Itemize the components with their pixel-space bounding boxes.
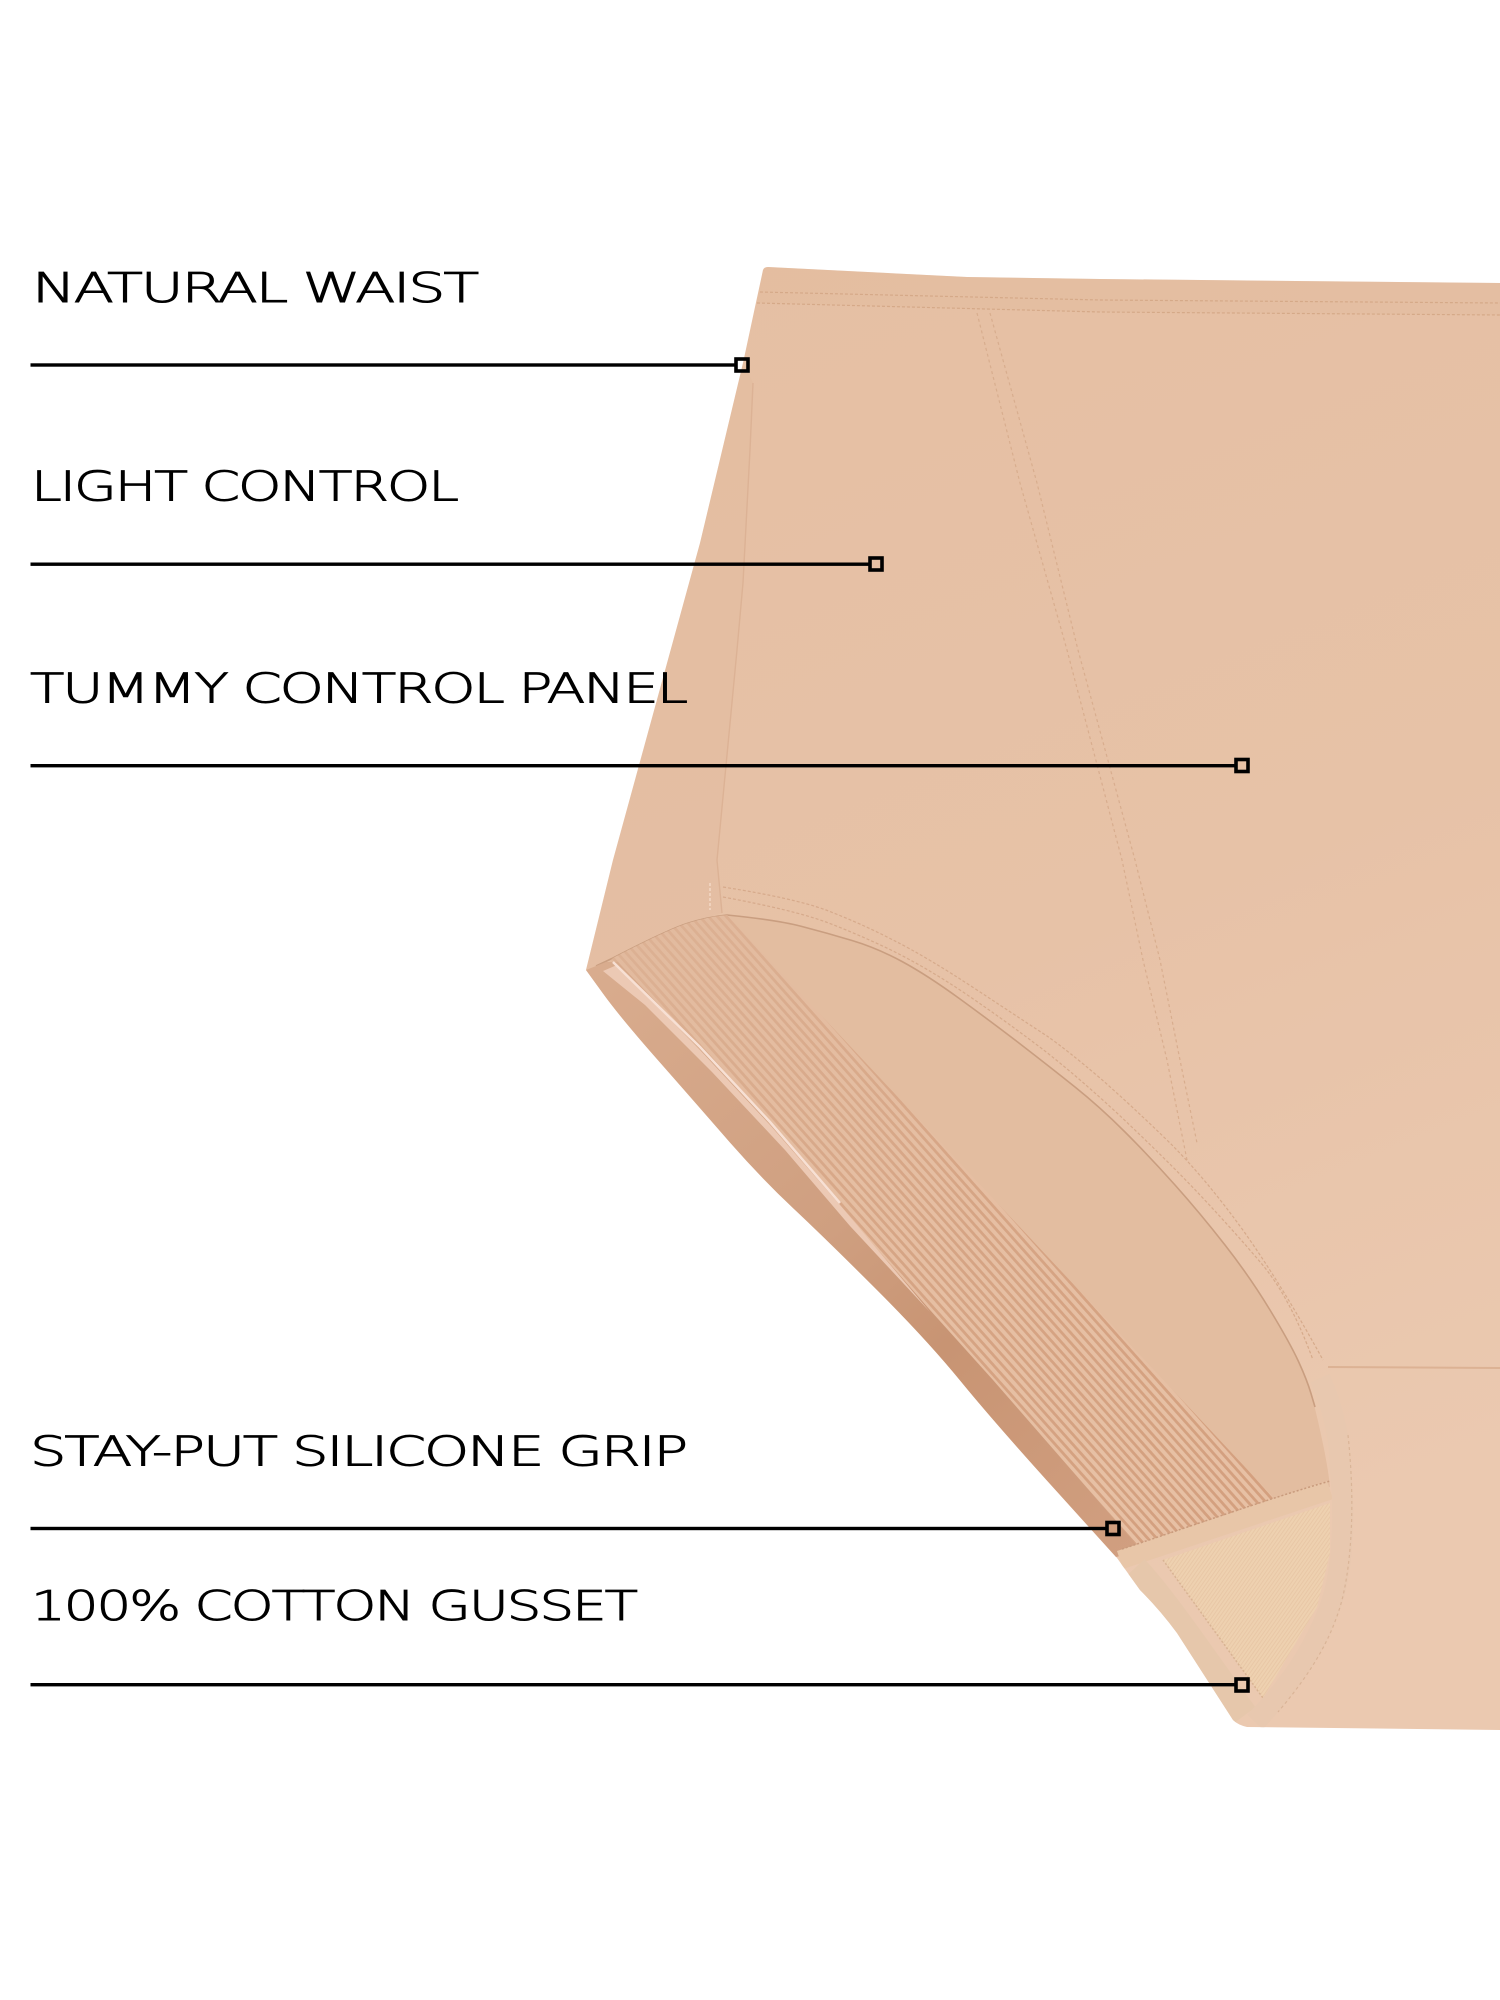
side panel tone [586, 363, 753, 970]
side seam [717, 383, 753, 913]
garment body [586, 267, 1500, 1730]
inner back panel [600, 915, 1330, 1551]
gusset seams [1117, 1435, 1352, 1728]
waistband tone [757, 267, 1500, 315]
tummy panel seam [977, 313, 1197, 1160]
callout: tummy control panel: TUMMY CONTROL PANEL [30, 664, 687, 712]
callout: light control [30, 463, 882, 570]
cotton gusset [1163, 1503, 1330, 1698]
waistband stitching [757, 292, 1500, 315]
leg opening shadow edge [596, 915, 1315, 1407]
front crotch seam [1328, 1367, 1500, 1368]
leg opening stitching [710, 883, 1323, 1360]
callout: tummy control panel [30, 664, 1248, 772]
panel: garment photo [586, 267, 1500, 1730]
silicone grip strip [586, 962, 1142, 1557]
callout: natural waist: NATURAL WAIST [32, 264, 479, 312]
callout: 100% cotton gusset: 100% COTTON GUSSET [31, 1582, 638, 1630]
ribbed elastic band [606, 915, 1274, 1551]
callout: 100% cotton gusset [30, 1582, 1248, 1691]
callout: stay-put silicone grip: STAY-PUT SILICONE GRIP [30, 1428, 686, 1476]
callout: natural waist [30, 264, 748, 371]
callout: light control: LIGHT CONTROL [31, 463, 458, 511]
callout: stay-put silicone grip [30, 1428, 1119, 1534]
